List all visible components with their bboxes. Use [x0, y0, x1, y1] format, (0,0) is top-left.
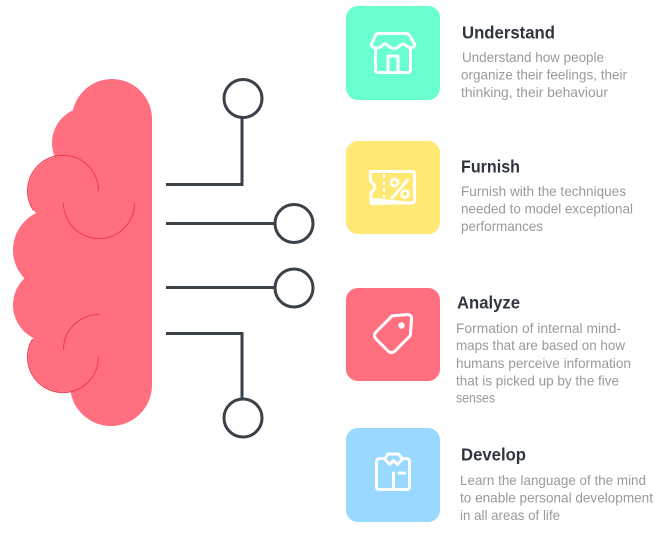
description: humans perceive information [456, 355, 631, 371]
connector 2 [166, 204, 313, 242]
brain illustration [13, 79, 152, 426]
icon: storefront [371, 34, 415, 72]
description: that is picked up by the five [456, 372, 619, 388]
description: organize their feelings, their [461, 66, 627, 82]
description [460, 472, 653, 523]
card: yellow [346, 141, 440, 234]
description: Formation of internal mind- [456, 320, 621, 336]
card: teal [346, 6, 440, 100]
item: Develop [346, 428, 653, 523]
heading: Analyze [457, 292, 520, 312]
heading: Furnish [461, 156, 520, 176]
heading: Understand [462, 22, 555, 42]
connector 4 [166, 334, 262, 437]
description: Understand how people [462, 49, 604, 65]
description [461, 183, 633, 234]
item: Furnish [346, 141, 633, 234]
heading: Develop [461, 444, 526, 464]
brain silhouette [13, 79, 152, 426]
description: to enable personal development [460, 490, 653, 506]
connector lines and nodes [166, 80, 313, 437]
item: Understand [346, 6, 627, 100]
card: blue [346, 428, 440, 522]
icon: price tag [374, 314, 412, 352]
card: red [346, 288, 440, 381]
description: Learn the language of the mind [460, 472, 646, 488]
icon: shirt [376, 454, 410, 490]
brain fold lines [28, 155, 135, 393]
description: Furnish with the techniques [461, 183, 626, 199]
description: maps that are based on how [456, 337, 626, 353]
description [461, 49, 627, 100]
connector 3 [166, 269, 313, 307]
description: thinking, their behaviour [461, 84, 608, 100]
description: performances [461, 218, 543, 234]
description [456, 320, 631, 406]
icon: discount ticket [370, 172, 414, 204]
description: in all areas of life [460, 507, 560, 523]
description: needed to model exceptional [461, 200, 633, 216]
item: Analyze [346, 288, 631, 406]
connector 1 [166, 80, 262, 184]
description: senses [456, 390, 495, 406]
